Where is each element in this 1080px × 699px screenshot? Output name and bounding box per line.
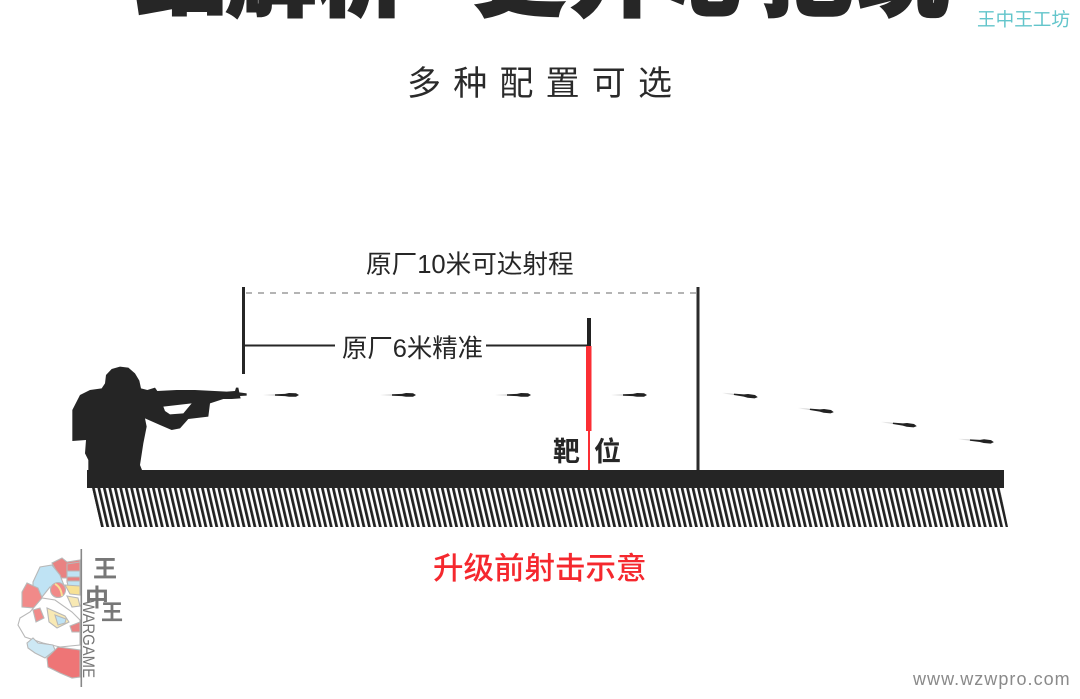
label: 10 metre range: 原厂10米可达射程	[366, 250, 574, 279]
shooter silhouette	[72, 367, 247, 477]
icon: lion head	[18, 558, 80, 678]
subtitle: 多种配置可选	[407, 65, 684, 103]
target label: 靶	[553, 437, 580, 467]
brush wordmark: 中	[85, 585, 109, 612]
ground bar	[87, 470, 1004, 488]
brand label: top right: 王中王工坊	[977, 9, 1070, 30]
divider line	[80, 549, 82, 687]
target label	[553, 436, 621, 467]
hatched ground	[92, 488, 1008, 527]
website: www.wzwpro.com	[912, 669, 1071, 689]
brush wordmark: 王	[93, 556, 117, 583]
brush wordmark	[85, 556, 123, 625]
logo: lion head and wordmark	[18, 549, 123, 687]
brush wordmark: 王	[101, 600, 123, 625]
label: 6 metre accuracy: 原厂6米精准	[342, 335, 483, 363]
bullet trajectory	[263, 391, 994, 444]
WARGAME wordmark: WARGAME	[79, 600, 97, 678]
page title (cropped at top edge)	[136, 0, 954, 28]
target post	[586, 318, 592, 472]
target label: 位	[594, 436, 621, 467]
caption: 升级前射击示意	[433, 552, 646, 586]
range marker: 10 metre	[242, 287, 700, 471]
range marker: 6 metre	[245, 344, 588, 346]
